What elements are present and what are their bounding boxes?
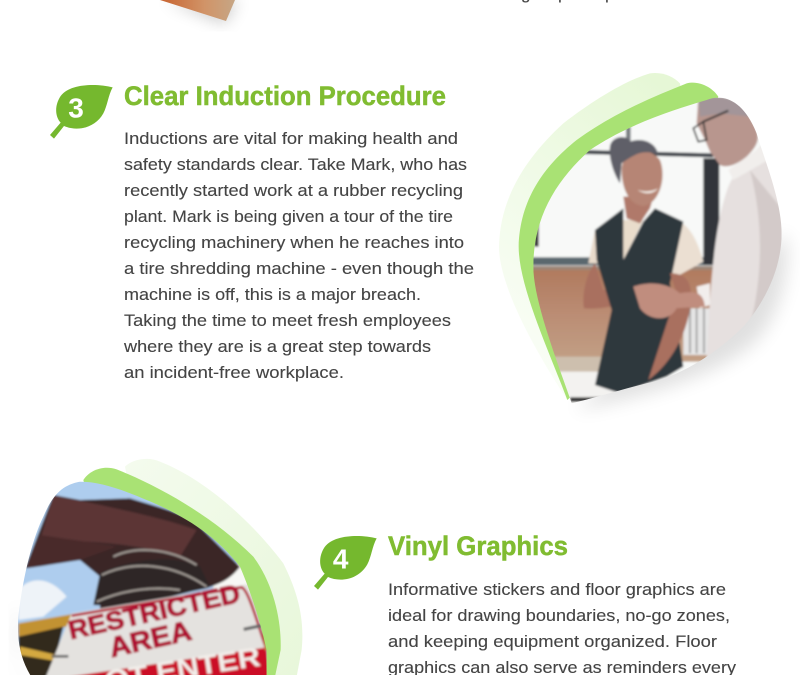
text block: vinyl graphics: Informative stickers and floor graphics are bbox=[388, 580, 726, 599]
man bbox=[705, 161, 778, 358]
photo bbox=[533, 98, 782, 403]
photo: RESTRICTED bbox=[65, 578, 243, 645]
text block: induction: machine is off, this is a major breach. bbox=[124, 285, 421, 304]
photo: handshake in leaf frame bbox=[499, 73, 797, 420]
text block: induction: recently started work at a rubber recycling bbox=[124, 181, 463, 200]
icon: leaf number 3: 3 bbox=[68, 92, 84, 123]
light leaf layer bbox=[125, 459, 302, 675]
light leaf layer bbox=[499, 73, 713, 400]
icon: leaf number 4 bbox=[314, 536, 377, 590]
text block: induction: plant. Mark is being given a tour of the tire bbox=[124, 207, 453, 226]
text block: induction: recycling machinery when he reaches into bbox=[124, 233, 464, 252]
woman bbox=[588, 230, 600, 263]
yellow scaffold bbox=[18, 613, 77, 637]
text block: induction: where they are is a great step towards bbox=[123, 337, 431, 356]
green leaf layer bbox=[83, 468, 281, 675]
icon: leaf number 3 bbox=[50, 85, 113, 139]
text block: induction: safety standards clear. Take Mark, who has bbox=[124, 155, 467, 174]
text block: vinyl graphics: and keeping equipment organized. Floor bbox=[388, 632, 717, 651]
text block: vinyl graphics bbox=[388, 580, 737, 675]
heading: Vinyl Graphics: Vinyl Graphics bbox=[388, 531, 568, 561]
photo bbox=[18, 482, 267, 675]
previous section photo fragment bbox=[160, 0, 238, 24]
photo: AREA bbox=[106, 615, 194, 663]
sign bbox=[43, 583, 270, 675]
shadow bbox=[14, 600, 27, 675]
text block: induction: an incident-free workplace. bbox=[124, 363, 344, 382]
text block: vinyl graphics: ideal for drawing boundaries, no-go zones, bbox=[388, 606, 730, 625]
text block: induction: a tire shredding machine - even though the bbox=[124, 259, 474, 278]
text block: induction: Inductions are vital for making health and bbox=[124, 129, 458, 148]
shadow bbox=[575, 233, 787, 410]
text block: induction: Taking the time to meet fresh employees bbox=[124, 311, 451, 330]
steel structure bbox=[25, 495, 240, 610]
icon: leaf number 4: 4 bbox=[333, 543, 349, 574]
photo: restricted area in leaf frame bbox=[0, 459, 302, 675]
green leaf layer bbox=[519, 83, 718, 400]
heading: Clear Induction Procedure: Clear Induction Procedure bbox=[124, 81, 446, 111]
text block: induction bbox=[123, 129, 474, 382]
